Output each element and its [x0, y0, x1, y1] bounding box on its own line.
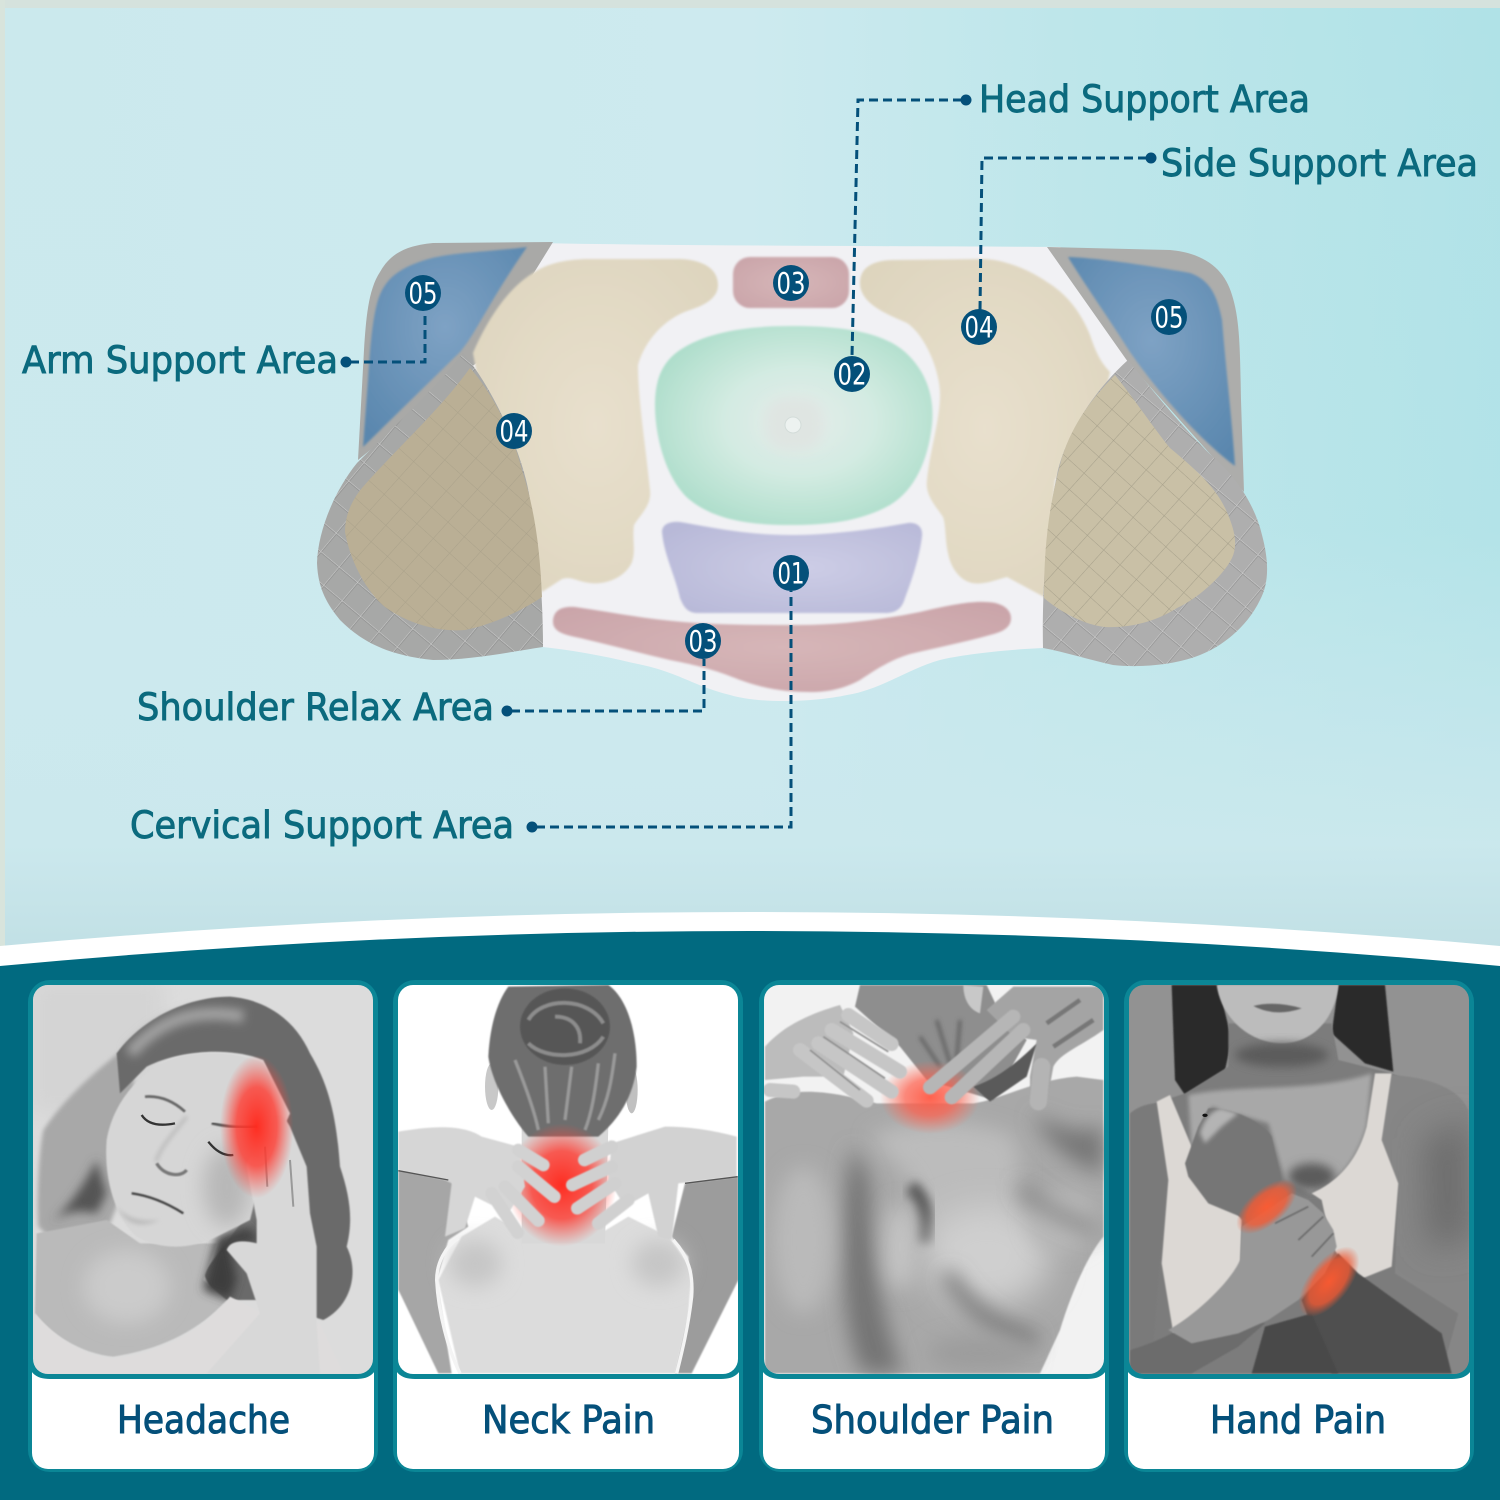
left beige tinted lobe	[345, 368, 542, 630]
caption: Headache: Headache	[117, 1398, 290, 1442]
photo ring	[28, 1340, 378, 1379]
caption: Neck Pain: Neck Pain	[482, 1398, 655, 1442]
photo ring	[759, 1340, 1109, 1379]
left hand	[398, 1127, 554, 1237]
green head support	[655, 326, 933, 525]
photo: woman with headache	[30, 980, 373, 1374]
caption area	[1128, 1340, 1470, 1469]
label: Shoulder Relax Area: Shoulder Relax Area	[137, 686, 494, 729]
caption area	[32, 1340, 374, 1469]
leader line: side support	[980, 152, 1156, 310]
caption area	[763, 1340, 1105, 1469]
leader line: head support	[852, 94, 972, 356]
caption area	[397, 1340, 739, 1469]
card: Shoulder Pain	[759, 980, 1109, 1472]
right arm wing grey	[1047, 247, 1244, 492]
photo ring	[1124, 1340, 1474, 1379]
badge 05 left: 05	[408, 276, 438, 310]
badge 05 right: 05	[1154, 300, 1184, 334]
card frame	[1124, 980, 1474, 1472]
badge 04 left: 04	[500, 414, 528, 448]
left arm wing grey	[358, 242, 553, 460]
left grey lobe	[317, 353, 543, 660]
photo: woman holding neck	[398, 985, 738, 1374]
label: Side Support Area: Side Support Area	[1161, 142, 1478, 185]
badge 01: 01	[778, 556, 804, 590]
leader line: arm support	[340, 311, 425, 368]
caption: Hand Pain: Hand Pain	[1210, 1398, 1386, 1442]
caption: Shoulder Pain: Shoulder Pain	[811, 1398, 1054, 1442]
label: Head Support Area: Head Support Area	[979, 78, 1310, 121]
background	[0, 0, 1500, 960]
right beige side support	[860, 259, 1110, 598]
centre dimple	[765, 398, 823, 450]
top pink shoulder pad	[733, 257, 849, 308]
pillow white body	[460, 243, 1150, 701]
badge 03 lower: 03	[688, 624, 718, 658]
card frame	[28, 980, 378, 1472]
badge 02: 02	[838, 358, 866, 392]
right grey lobe	[1043, 360, 1267, 666]
right hand	[572, 1127, 737, 1240]
purple cervical support	[662, 522, 922, 613]
card: Hand Pain	[1124, 980, 1474, 1472]
pillow diagram	[317, 242, 1267, 701]
left blue panel	[363, 247, 527, 447]
photo: man holding shoulder	[764, 985, 1104, 1374]
photo ring	[393, 1340, 743, 1379]
card frame	[759, 980, 1109, 1472]
badge 03 top: 03	[776, 266, 806, 300]
card: Neck Pain	[393, 980, 743, 1472]
card frame	[393, 980, 743, 1472]
bottom curved band	[0, 912, 1500, 1500]
right blue panel	[1068, 257, 1235, 466]
leader line: cervical support	[526, 591, 791, 832]
left beige side support	[473, 259, 718, 592]
label: Cervical Support Area: Cervical Support Area	[130, 804, 514, 847]
badge 04 right: 04	[964, 310, 994, 344]
label: Arm Support Area: Arm Support Area	[22, 339, 338, 382]
right beige tinted lobe	[1044, 375, 1235, 627]
card: Headache	[28, 980, 378, 1472]
left hand	[765, 1005, 900, 1101]
photo: woman holding wrist	[1129, 985, 1469, 1374]
pink lower shoulder relax	[553, 602, 1011, 692]
leader line: shoulder relax	[502, 659, 704, 716]
right hand	[930, 987, 1103, 1103]
